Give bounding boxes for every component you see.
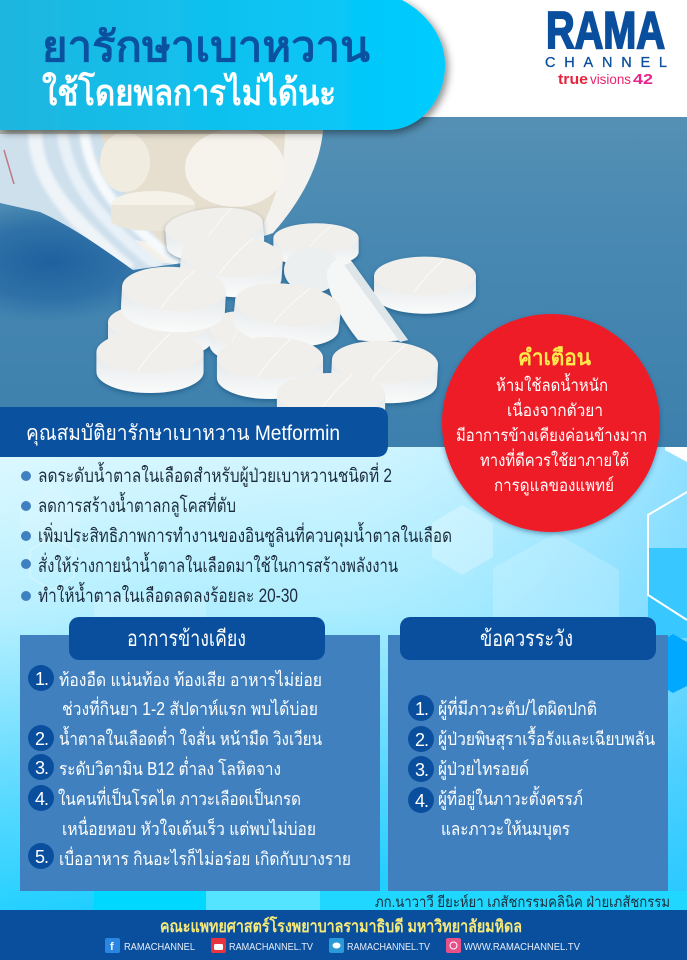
side effects list: 4. (35, 789, 49, 809)
social: youtube: RAMACHANNEL.TV (229, 941, 313, 953)
social: twitter: RAMACHANNEL.TV (347, 941, 430, 953)
panel: precautions (388, 617, 668, 891)
social: youtube (211, 938, 313, 953)
faculty name: คณะแพทยศาสตร์โรงพยาบาลรามาธิบดี มหาวิทยาลัยมหิดล (160, 916, 522, 936)
tablets (96, 204, 476, 435)
side effects heading: อาการข้างเคียง (127, 626, 246, 651)
precautions list: ผู้ป่วยพิษสุราเรื้อรังและเฉียบพลัน (438, 726, 655, 750)
logo: Rama Channel: 42 (633, 71, 653, 88)
bullet list: Metformin properties: สั่งให้ร่างกายนำน้ำตาลในเลือดมาใช้ในการสร้างพลังงาน (38, 552, 398, 577)
bullet list: Metformin properties: ทำให้น้ำตาลในเลือดลดลงร้อยละ 20-30 (38, 582, 298, 607)
side effects list (28, 665, 351, 869)
footer (0, 910, 687, 960)
precautions list (408, 695, 655, 840)
precautions heading: ข้อควรระวัง (480, 626, 573, 651)
title line 2: ใช้โดยพลการไม่ได้นะ (42, 71, 336, 113)
logo: Rama Channel: true (558, 71, 588, 88)
pills photo (0, 117, 687, 447)
title line 1: ยารักษาเบาหวาน (42, 23, 370, 70)
bullet list: Metformin properties: เพิ่มประสิทธิภาพการทำงานของอินซูลินที่ควบคุมน้ำตาลในเลือด (38, 522, 452, 548)
panel: side effects (20, 617, 380, 891)
side effects list: ในคนที่เป็นโรคไต ภาวะเลือดเป็นกรด (58, 786, 301, 809)
side effects list: 1. (35, 669, 49, 689)
warning text: มีอาการข้างเคียงค่อนข้างมาก (456, 426, 647, 445)
bullet list: Metformin properties: ลดระดับน้ำตาลในเลือดสำหรับผู้ป่วยเบาหวานชนิดที่ 2 (38, 462, 392, 487)
side effects list: 2. (35, 729, 49, 749)
precautions list: 1. (415, 699, 429, 719)
side effects list: ช่วงที่กินยา 1-2 สัปดาห์แรก พบได้บ่อย (62, 696, 318, 719)
logo: Rama Channel: CHANNEL (545, 55, 667, 71)
precautions list: และภาวะให้นมบุตร (441, 818, 570, 840)
bullet list: Metformin properties: ลดการสร้างน้ำตาลกลูโคสที่ตับ (38, 492, 236, 517)
social: twitter (329, 938, 430, 953)
side effects list: เบื่ออาหาร กินอะไรก็ไม่อร่อย เกิดกับบางราย (59, 846, 351, 869)
precautions list: ผู้ที่อยู่ในภาวะตั้งครรภ์ (438, 786, 583, 810)
side effects list: 3. (35, 758, 49, 778)
social: facebook (105, 938, 195, 953)
header title pill (0, 0, 445, 130)
precautions heading (400, 617, 656, 660)
Metformin properties heading bar (0, 407, 388, 457)
side effects list: 5. (35, 847, 49, 867)
warning text: เนื่องจากตัวยา (507, 398, 603, 420)
precautions list: 3. (415, 760, 429, 780)
bullet list: Metformin properties (21, 462, 452, 607)
logo: Rama Channel: visions (590, 71, 631, 87)
side effects heading (69, 617, 325, 660)
warning text: ทางที่ดีควรใช้ยาภายใต้ (480, 448, 629, 470)
Metformin properties heading bar: คุณสมบัติยารักษาเบาหวาน Metformin (26, 422, 340, 446)
lower background (0, 447, 687, 910)
side effects list: ท้องอืด แน่นท้อง ท้องเสีย อาหารไม่ย่อย (59, 669, 322, 690)
social: website (446, 938, 580, 953)
precautions list: ผู้ที่มีภาวะตับ/ไตผิดปกติ (438, 696, 597, 720)
precautions list: ผู้ป่วยไทรอยด์ (438, 758, 529, 780)
warning text: การดูแลของแพทย์ (494, 476, 614, 496)
warning text: ห้ามใช้ลดน้ำหนัก (496, 373, 608, 395)
logo: Rama Channel (545, 2, 667, 88)
warning text (456, 373, 647, 496)
warning circle (442, 314, 660, 532)
social: facebook: RAMACHANNEL (124, 941, 195, 953)
side effects list: ระดับวิตามิน B12 ต่ำลง โลหิตจาง (59, 756, 281, 779)
precautions list: 4. (415, 791, 429, 811)
medicine bottle (0, 129, 330, 275)
precautions list: 2. (415, 730, 429, 750)
side effects list: เหนื่อยหอบ หัวใจเต้นเร็ว แต่พบไม่บ่อย (62, 816, 316, 839)
side effects list: น้ำตาลในเลือดต่ำ ใจสั่น หน้ามืด วิงเวียน (59, 726, 322, 749)
social: website: WWW.RAMACHANNEL.TV (464, 941, 580, 953)
social: facebook: f (110, 941, 114, 953)
warning heading: คำเตือน (518, 345, 591, 370)
